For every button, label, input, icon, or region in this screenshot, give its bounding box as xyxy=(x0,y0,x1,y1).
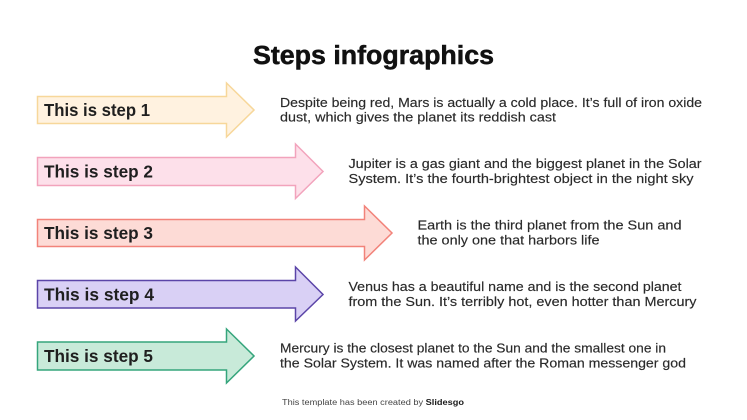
arrow: step 3 xyxy=(38,206,392,260)
description: step 3: Earth is the third planet from the Sun and xyxy=(418,218,682,232)
label: step 4: This is step 4 xyxy=(44,284,154,304)
description: step 5 xyxy=(280,342,686,370)
arrow: step 4 xyxy=(38,267,323,321)
title: Steps infographics xyxy=(253,42,494,70)
step 4 row xyxy=(38,267,697,321)
description: step 2: System. It’s the fourth-brightest object in the night sky xyxy=(348,172,694,186)
description: step 3: the only one that harbors life xyxy=(418,234,600,248)
description: step 4: from the Sun. It’s terribly hot, even hotter than Mercury xyxy=(348,295,697,309)
label: step 5: This is step 5 xyxy=(44,346,153,366)
step 2 row xyxy=(38,144,702,198)
description: step 1 xyxy=(280,96,702,124)
description: step 4: Venus has a beautiful name and is the second planet xyxy=(348,280,682,294)
description: step 5: the Solar System. It was named after the Roman messenger god xyxy=(280,356,686,370)
description: step 3 xyxy=(418,218,682,248)
footer credit: This template has been created by Slidesgo xyxy=(282,398,464,407)
step 3 row xyxy=(38,206,682,260)
description: step 1: dust, which gives the planet its reddish cast xyxy=(280,110,557,124)
description: step 2 xyxy=(348,157,702,186)
step 5 row xyxy=(38,329,686,383)
arrow: step 1 xyxy=(38,83,254,137)
arrow: step 5 xyxy=(38,329,254,383)
label: step 3: This is step 3 xyxy=(44,223,153,243)
description: step 2: Jupiter is a gas giant and the biggest planet in the Solar xyxy=(348,157,702,171)
description: step 4 xyxy=(348,280,697,309)
description: step 1: Despite being red, Mars is actually a cold place. It’s full of iron oxide xyxy=(280,96,702,110)
step 1 row xyxy=(38,83,702,137)
description: step 5: Mercury is the closest planet to the Sun and the smallest one in xyxy=(280,342,666,356)
arrow: step 2 xyxy=(38,144,323,198)
label: step 1: This is step 1 xyxy=(44,100,150,120)
label: step 2: This is step 2 xyxy=(44,162,153,182)
